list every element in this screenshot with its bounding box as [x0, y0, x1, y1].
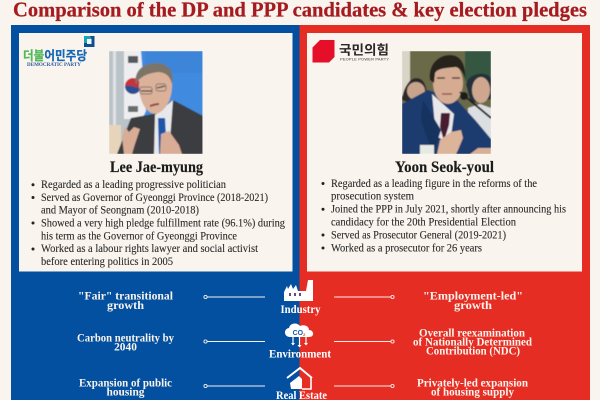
connector lines: DP side [204, 295, 265, 388]
logo: Democratic Party: DEMOCRATIC PARTY [27, 63, 81, 68]
bullet list: Yoon Seok-youl: candidacy for the 20th Presidential Election [331, 216, 516, 228]
candidate card: Yoon Seok-youl [307, 33, 582, 272]
bullet list: Lee Jae-myung: his term as the Governor of Gyeonggi Province [41, 230, 237, 242]
logo: People Power Party: 국민의힘 [339, 40, 389, 58]
bullet list: Yoon Seok-youl: Regarded as a leading figure in the reforms of the [331, 178, 537, 190]
bullet list: Lee Jae-myung: before entering politics in 2005 [41, 256, 173, 268]
icon: CO2 cloud [285, 324, 313, 348]
bullet list: Yoon Seok-youl: Served as Prosecutor General (2019-2021) [331, 229, 506, 241]
connector lines: PPP side [334, 295, 394, 388]
pledge: PPP industry: "Employment-led" [423, 290, 523, 302]
bullet list: Yoon Seok-youl: Worked as a prosecutor for 26 years [331, 242, 482, 254]
bullet list: Lee Jae-myung: Regarded as a leading progressive politician [41, 179, 226, 191]
bullet list: Lee Jae-myung: Worked as a labour rights lawyer and social activist [41, 243, 259, 255]
pledge: PPP real estate: of housing supply [431, 386, 514, 398]
logo: Democratic Party [23, 36, 94, 68]
pledge: PPP real estate: Privately-led expansion [417, 378, 529, 390]
logo: People Power Party [312, 40, 389, 62]
pledge: PPP industry: growth [454, 300, 493, 312]
name: Yoon Seok-youl: Yoon Seok-youl [395, 159, 495, 176]
photo: Lee Jae-myung [109, 51, 203, 154]
label: Industry: Industry [280, 303, 321, 316]
pledge: DP industry: "Fair" transitional [78, 290, 173, 302]
panel: People Power Party side [300, 25, 590, 400]
bullet list: Lee Jae-myung: Showed a very high pledge fulfillment rate (96.1%) during [41, 218, 285, 230]
photo: Yoon Seok-youl [402, 51, 491, 154]
bullet list: Lee Jae-myung: Served as Governor of Gyeonggi Province (2018-2021) [41, 192, 268, 204]
bullet list: Lee Jae-myung: and Mayor of Seongnam (2010-2018) [41, 205, 199, 217]
pledge: PPP environment: Contribution (NDC) [426, 346, 520, 358]
name: Lee Jae-myung: Lee Jae-myung [110, 159, 203, 176]
pledge: DP environment: Carbon neutrality by [77, 332, 174, 344]
pledge: PPP environment: Overall reexamination [419, 328, 526, 340]
logo: Democratic Party: 더불어민주당 [23, 45, 87, 64]
pledge: DP environment: 2040 [114, 342, 137, 354]
candidate card: Lee Jae-myung [19, 33, 292, 272]
pledge: DP industry: growth [107, 300, 145, 312]
icon: house [287, 368, 312, 389]
icon: CO2 cloud: CO [293, 330, 304, 337]
icon: CO2 cloud: 2 [303, 332, 306, 337]
bullet list: Yoon Seok-youl [322, 178, 566, 254]
bullet list: Yoon Seok-youl: Joined the PPP in July 2021, shortly after announcing his [331, 204, 566, 216]
panel: Democratic Party side [11, 25, 300, 400]
icon: factory [284, 280, 313, 301]
pledge: DP real estate: housing [106, 386, 145, 398]
logo: People Power Party: PEOPLE POWER PARTY [340, 56, 389, 62]
bullet list: Lee Jae-myung [32, 179, 285, 268]
bullet list: Yoon Seok-youl: prosecution system [331, 191, 414, 203]
label: Environment: Environment [269, 348, 331, 360]
pledge: DP real estate: Expansion of public [79, 378, 172, 390]
pledge: PPP environment: of Nationally Determined [413, 337, 533, 349]
